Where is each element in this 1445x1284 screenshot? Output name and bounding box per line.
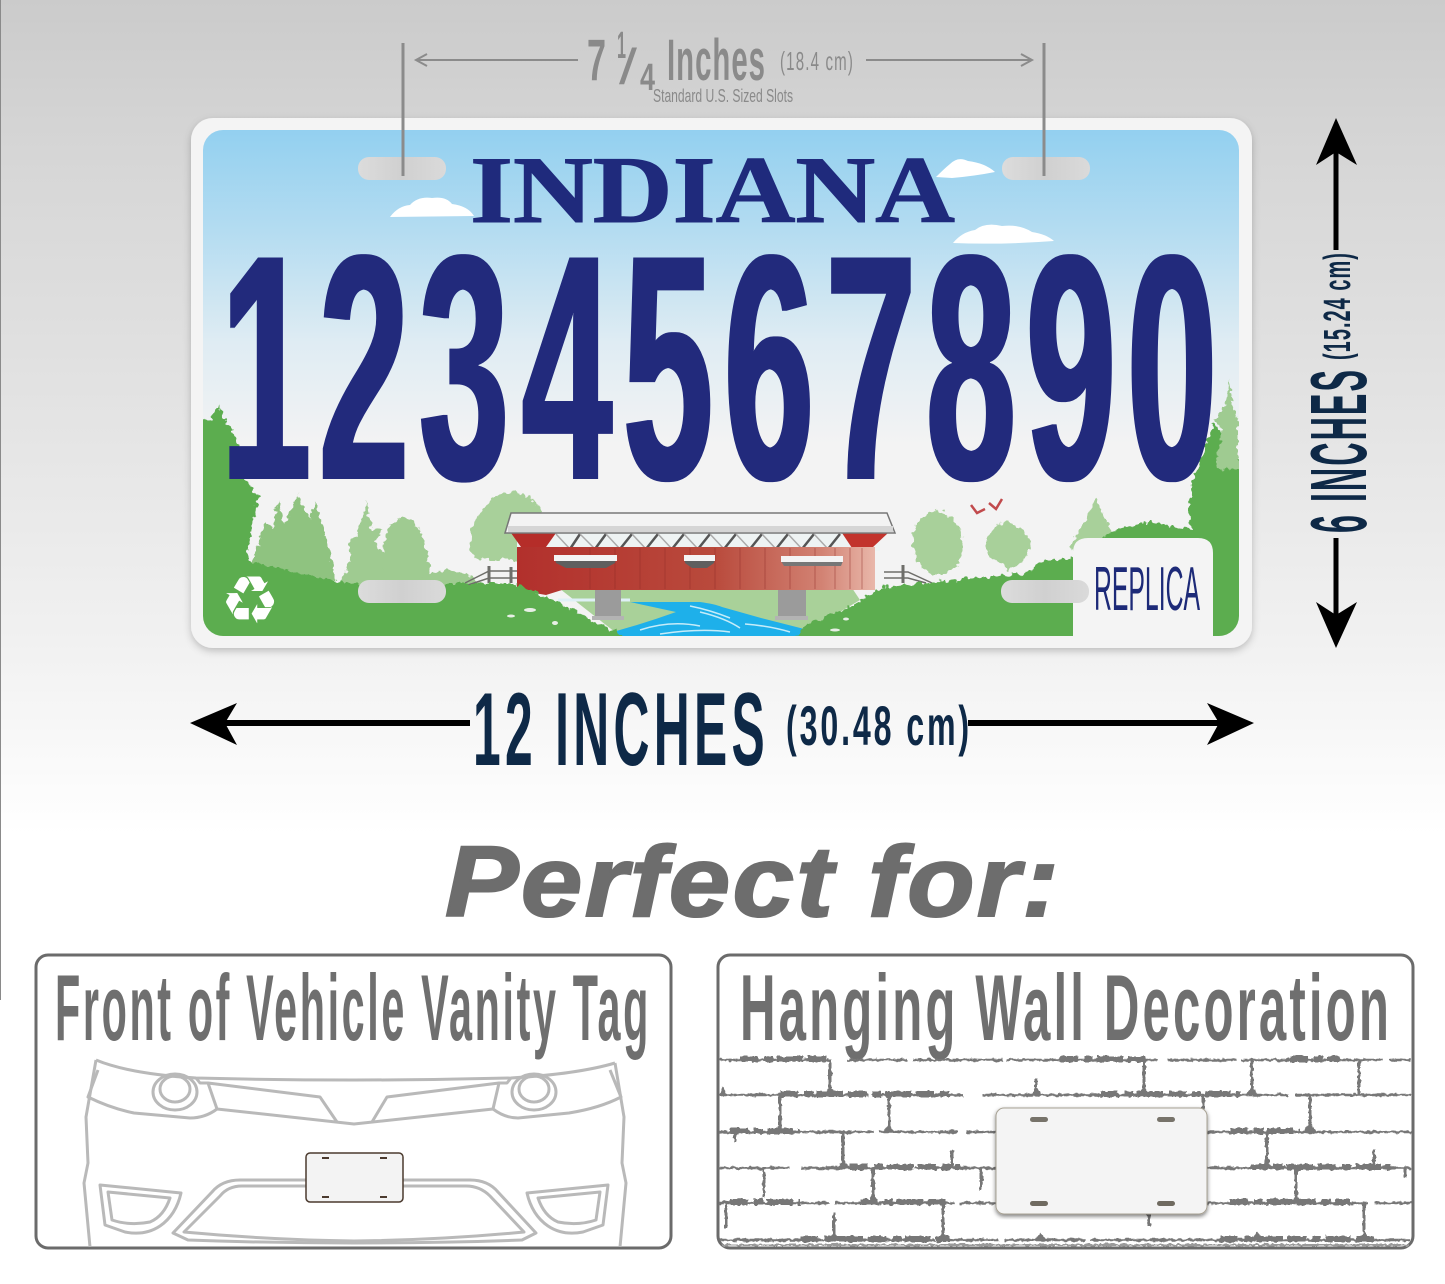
fences (465, 565, 932, 586)
slot spacing dimension (403, 25, 1044, 176)
pebbles on grass (507, 608, 849, 632)
height dimension arrow: 6 INCHES (1294, 368, 1383, 533)
background trees left (245, 492, 480, 584)
green ground right (795, 423, 1245, 640)
replica tag (1073, 538, 1213, 640)
state name: INDIANA (470, 137, 955, 243)
car front line drawing (84, 1060, 626, 1247)
slot spacing dimension: / (619, 39, 637, 95)
height dimension arrow: (15.24 cm) (1317, 252, 1359, 360)
plate number: 1234567890 (221, 188, 1217, 547)
hillside under bridge (562, 590, 860, 631)
width dimension arrow: 12 INCHES (473, 672, 769, 788)
slot spacing dimension: 7 (587, 28, 606, 93)
plate scene (195, 130, 1245, 640)
panel: hanging wall decoration (718, 955, 1413, 1248)
slot spacing dimension: 1 (617, 25, 626, 67)
slot spacing dimension: Standard U.S. Sized Slots (653, 86, 793, 106)
river (558, 600, 816, 637)
slot spacing dimension: Inches (667, 28, 766, 93)
mini plate on car (306, 1153, 403, 1202)
blank plate on wall (996, 1108, 1207, 1214)
width dimension arrow (190, 672, 1254, 788)
tall plant right (1215, 380, 1238, 470)
heading: perfect for: Perfect for: (445, 826, 1061, 938)
trees behind bridge and on right (470, 492, 1114, 574)
license plate (191, 118, 1252, 648)
clouds (390, 159, 1054, 244)
brick wall (719, 1059, 1411, 1245)
covered bridge (505, 513, 895, 620)
mounting slots (358, 157, 1090, 603)
plate scene: REPLICA (1094, 555, 1200, 624)
birds (971, 499, 1002, 513)
infographic canvas: Front of Vehicle Vanity Tag (55, 955, 651, 1060)
slot spacing dimension: (18.4 cm) (780, 46, 854, 76)
recycle icon: ♻ (220, 562, 280, 639)
width dimension arrow: (30.48 cm) (786, 694, 972, 757)
panel: front of vehicle (36, 955, 671, 1248)
slot spacing dimension: 4 (640, 57, 655, 99)
green forest and ground left (195, 405, 632, 640)
